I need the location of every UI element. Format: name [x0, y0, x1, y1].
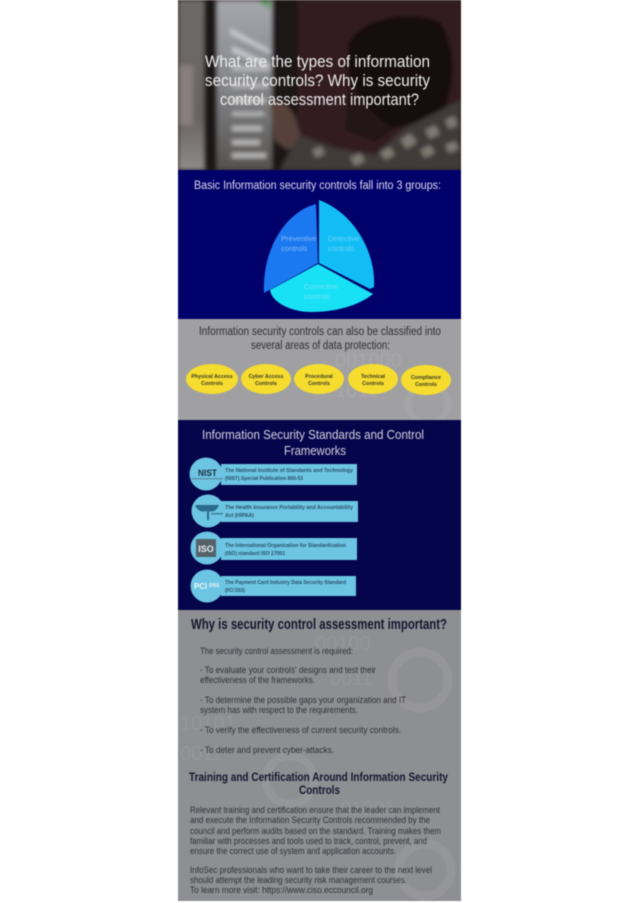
text: assessment reasons: - To deter and prevent cyber-attacks. — [200, 745, 334, 756]
row: NIST — [190, 458, 357, 490]
text: classification intro: Information security controls can also be classified into — [199, 326, 441, 338]
heading: training and certification: Training and Certification Around Information Security — [189, 772, 449, 784]
ovals: control areas: Controls — [255, 381, 277, 387]
ovals: control areas: Controls — [308, 381, 330, 387]
infographic — [177, 0, 462, 902]
text: call to action — [190, 865, 432, 896]
segment: detective: controls — [328, 244, 355, 253]
segment: corrective: Corrective — [304, 282, 338, 291]
row: PCI DSS: The Payment Card Industry Data Security Standard — [225, 580, 346, 586]
panel: areas of data protection: 001000 — [335, 350, 402, 372]
segment: detective: Detective — [328, 234, 359, 243]
text: call to action: To learn more visit: https://www.ciso.eccouncil.org — [190, 885, 373, 896]
ovals: control areas: Cyber Access — [249, 374, 283, 380]
photo: technician at server rack — [178, 0, 461, 170]
row: NIST: The National Institute of Standards and Technology — [225, 468, 353, 474]
ovals: control areas: Physical Access — [191, 374, 233, 380]
pie diagram — [264, 200, 374, 312]
panel: three control groups — [178, 170, 461, 319]
row: HIPAA: Act (HIPAA) — [225, 513, 254, 519]
text: assessment reasons — [200, 646, 406, 756]
text: classification intro — [199, 326, 441, 352]
heading: standards: Information Security Standards and Control — [202, 427, 424, 442]
panel: hero photo with title — [178, 0, 461, 170]
panel: why assessment is important: 00100 — [315, 633, 371, 655]
row: ISO — [190, 532, 357, 564]
panel: standards and frameworks — [178, 420, 461, 610]
segment: corrective — [270, 264, 373, 312]
row: HIPAA: The Health Insurance Portability and Accountability — [225, 505, 353, 511]
row: ISO: The International Organization for Standardization — [225, 543, 346, 549]
text: training paragraph: and execute the Information Security Controls recommended by the — [190, 815, 430, 826]
text: assessment reasons: - To evaluate your controls' designs and test their — [200, 665, 376, 676]
panel: why assessment is important: 0011 — [330, 668, 373, 690]
title: control assessment important? — [220, 90, 419, 109]
heading: standards: Frameworks — [284, 443, 346, 458]
row: PCI DSS: (PCI DSS) — [225, 588, 245, 594]
row: NIST: (NIST) Special Publication 800-53 — [225, 476, 303, 482]
heading: why assessment: Why is security control assessment important? — [191, 617, 447, 633]
ovals: control areas: Procedural — [305, 374, 333, 380]
text: assessment reasons: effectiveness of the frameworks. — [200, 675, 315, 686]
title — [205, 52, 430, 109]
text: call to action: InfoSec professionals who want to take their career to the next level — [190, 865, 432, 876]
segment: corrective: controls — [304, 292, 331, 301]
ovals: control areas — [186, 364, 451, 395]
row: PCI DSS: DSS — [209, 583, 220, 589]
text: assessment reasons: The security control assessment is required: — [200, 646, 353, 657]
text: call to action: should attempt the leading security risk management courses. — [190, 875, 407, 886]
row: HIPAA — [192, 494, 358, 528]
title: What are the types of information — [205, 52, 430, 71]
row: NIST: NIST — [198, 468, 217, 478]
segment: preventive: Preventive — [281, 234, 316, 243]
text: assessment reasons: system has with respect to the requirements. — [200, 705, 358, 716]
heading: training and certification — [189, 772, 449, 797]
heading: three groups: Basic Information security controls fall into 3 groups: — [194, 180, 441, 192]
row: ISO: (ISO) standard ISO 27001 — [225, 551, 285, 557]
title: security controls? Why is security — [205, 71, 430, 90]
panel: why assessment is important — [178, 610, 461, 901]
ovals: control areas: Compliance — [411, 375, 441, 381]
text: training paragraph: council and perform audits based on the standard. Training makes them — [190, 826, 441, 837]
row: PCI DSS — [190, 570, 356, 602]
ovals: control areas: Controls — [415, 382, 437, 388]
segment: preventive — [264, 204, 318, 293]
text: training paragraph: Relevant training and certification ensure that the leader can implement — [190, 805, 440, 816]
text: assessment reasons: - To determine the possible gaps your organization and IT — [200, 695, 406, 706]
panel: why assessment is important: 0011 — [180, 743, 223, 765]
text: classification intro: several areas of data protection: — [251, 340, 390, 352]
ovals: control areas: Controls — [362, 381, 384, 387]
heading: training and certification: Controls — [299, 785, 340, 797]
text: training paragraph — [190, 805, 441, 857]
segment: preventive: controls — [281, 244, 308, 253]
row: ISO: ISO — [198, 544, 214, 554]
text: training paragraph: ensure the correct use of system and application accounts. — [190, 846, 396, 857]
text: assessment reasons: - To verify the effectiveness of current security controls. — [200, 725, 401, 736]
panel: areas of data protection — [178, 319, 461, 424]
panel: areas of data protection: 1011 — [335, 380, 378, 402]
segment: detective — [319, 200, 374, 289]
text: training paragraph: familiar with processes and tools used to track, control, prevent, and — [190, 836, 427, 847]
ovals: control areas: Controls — [201, 381, 223, 387]
row: PCI DSS: PCI — [194, 581, 207, 591]
heading: standards — [202, 427, 424, 458]
panel: why assessment is important: 10101 — [180, 713, 236, 735]
panel: why assessment is important: 01001 — [340, 798, 396, 820]
ovals: control areas: Technical — [361, 374, 386, 380]
